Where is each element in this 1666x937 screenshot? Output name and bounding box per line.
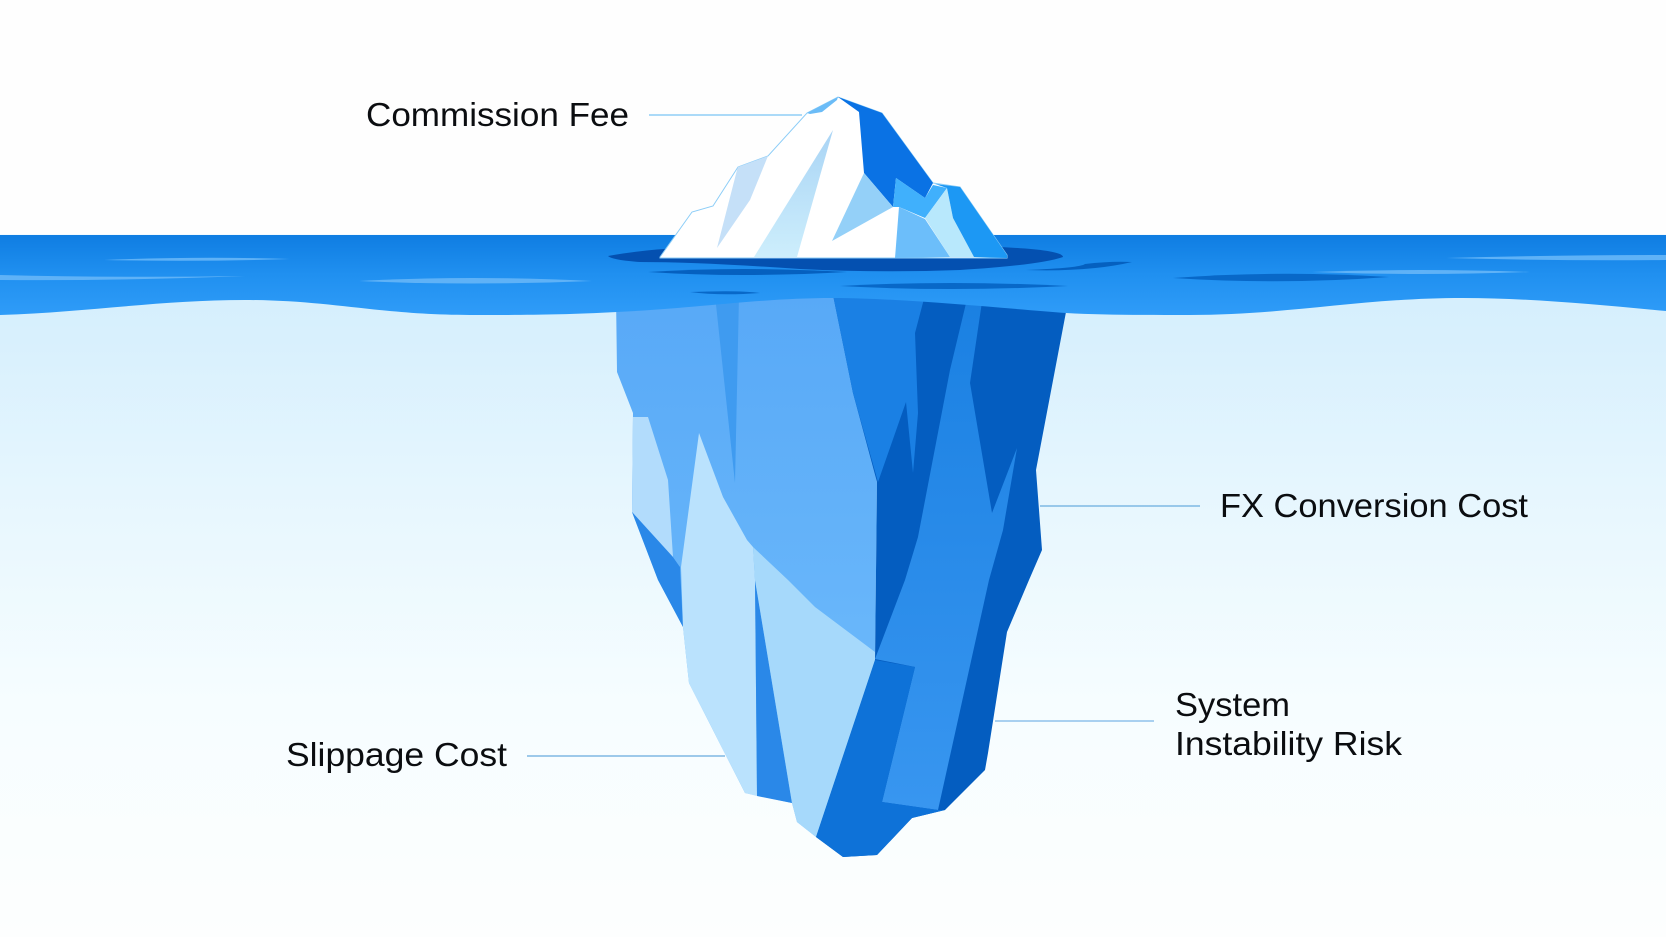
facet: mid blue upper — [833, 295, 925, 482]
facet: left pale — [632, 417, 680, 567]
tip centre shade — [754, 130, 833, 257]
submerged iceberg — [616, 295, 1066, 857]
label: system instability risk: System — [1175, 686, 1290, 723]
label: slippage cost: Slippage Cost — [286, 736, 507, 773]
label: commission fee: Commission Fee — [366, 96, 629, 133]
facet: bottom dark blue — [816, 660, 945, 857]
leader line: commission fee — [649, 114, 802, 116]
facet: pale tall — [681, 433, 757, 796]
label: system instability risk — [1175, 686, 1403, 762]
tip lower blue facet — [895, 207, 950, 258]
underwater base light face — [616, 295, 877, 837]
light ripples — [1312, 270, 1530, 274]
tip white silhouette — [660, 97, 1007, 258]
leader line: fx conversion cost — [1040, 505, 1200, 507]
water ripples — [0, 247, 1666, 294]
facet: mid blue lower — [875, 295, 1017, 810]
label: fx conversion cost: FX Conversion Cost — [1220, 487, 1528, 524]
facet: dark streak — [715, 295, 739, 483]
underwater dark right face — [816, 295, 1066, 857]
label: system instability risk: Instability Risk — [1175, 725, 1403, 762]
dark ripple around iceberg — [608, 247, 1063, 271]
facet: pale middle — [753, 547, 875, 837]
tip right edge facet — [935, 184, 1007, 258]
peak sliver — [807, 97, 838, 114]
leader line: system instability risk — [995, 720, 1154, 722]
facet: blue sliver — [755, 580, 792, 803]
tip pale facet — [925, 188, 974, 257]
leader line: slippage cost — [527, 755, 725, 757]
tip saturated facet — [893, 178, 947, 218]
tip dark face — [838, 97, 933, 207]
tip left shade — [717, 156, 768, 248]
facet: left blue — [632, 512, 683, 627]
iceberg tip — [660, 97, 1007, 258]
tip right shade — [832, 173, 893, 241]
water band — [0, 235, 1666, 315]
